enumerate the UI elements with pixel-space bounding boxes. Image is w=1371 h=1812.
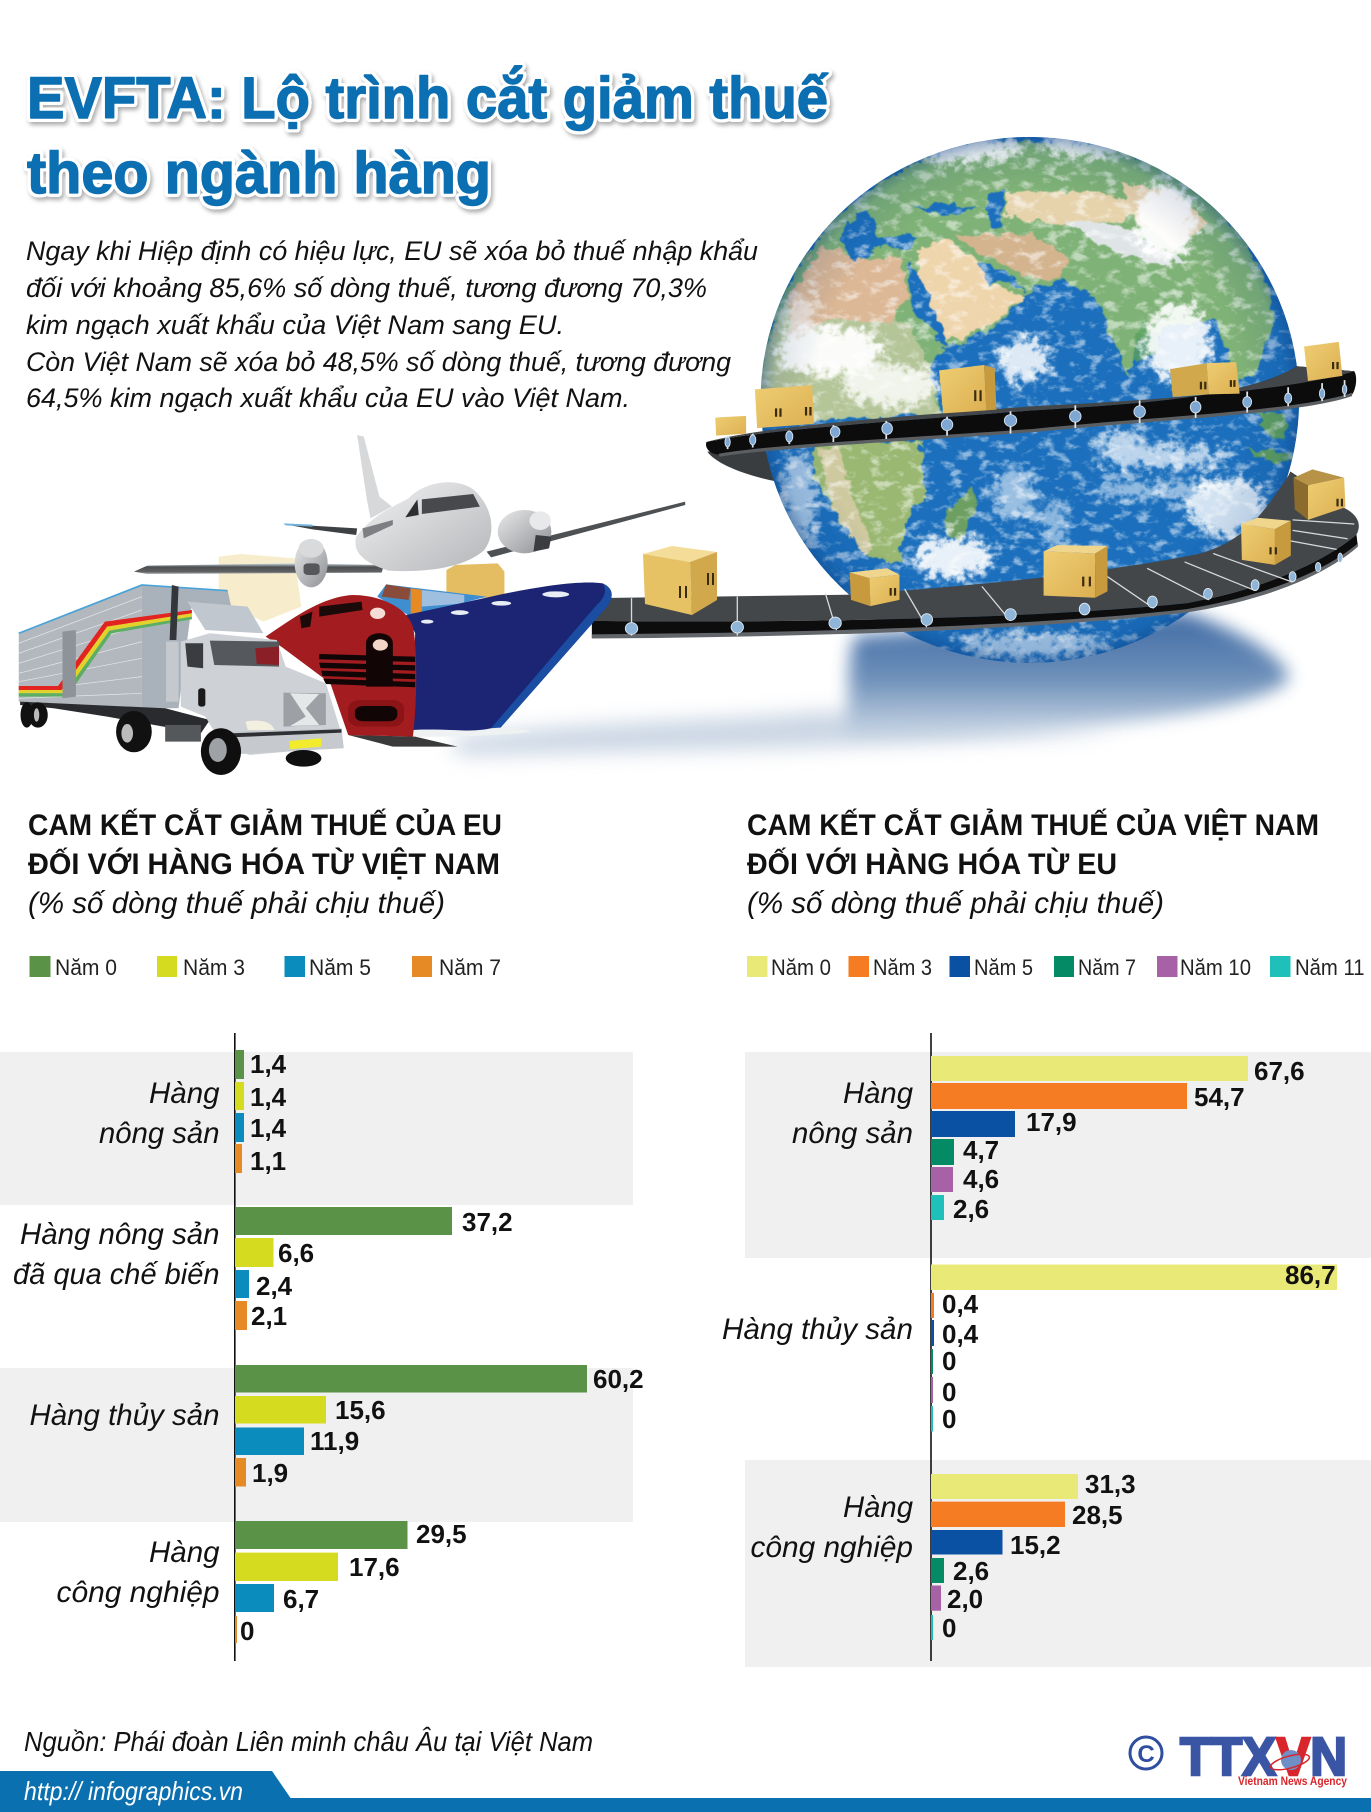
- logo: TTXVN: Vietnam News Agency: [1238, 1776, 1348, 1788]
- box behind ship: [446, 563, 504, 600]
- group: Hàng thủy sản: Hàng thủy sản: [30, 1399, 220, 1432]
- group: Hàng nông sản: nông sản: [99, 1117, 220, 1150]
- group: Hàng thủy sản: 15,6: [335, 1395, 386, 1425]
- title: [27, 66, 829, 206]
- intro paragraph: 64,5% kim ngạch xuất khẩu của EU vào Việt Nam.: [26, 383, 630, 413]
- band: Hàng nông sản: [745, 1052, 1371, 1258]
- group: Hàng thủy sản: Hàng thủy sản: [722, 1313, 913, 1346]
- group: Hàng thủy sản: 60,2: [593, 1364, 644, 1394]
- group: Hàng công nghiệp: 0: [942, 1613, 956, 1643]
- group: Hàng nông sản đã qua chế biến: 37,2: [462, 1207, 513, 1237]
- legend: right chart: Năm 7: [1078, 955, 1136, 980]
- band: Hàng nông sản: [0, 1052, 633, 1205]
- axis: [234, 1033, 236, 1661]
- group: Hàng nông sản: nông sản: [792, 1117, 913, 1150]
- group: Hàng công nghiệp: [750, 1469, 1136, 1643]
- axis: [930, 1033, 932, 1661]
- title: theo ngành hàng: [27, 141, 491, 206]
- group: Hàng công nghiệp: 6,7: [283, 1584, 319, 1614]
- legend: right chart: [747, 955, 1364, 980]
- group: Hàng thủy sản: 0: [942, 1346, 956, 1376]
- illustration: large box on lower belt: [643, 546, 717, 615]
- heading: left chart: ĐỐI VỚI HÀNG HÓA TỪ VIỆT NAM: [28, 847, 500, 881]
- illustration: globe with conveyor belts: [592, 133, 1359, 667]
- group: Hàng nông sản: 17,9: [1026, 1107, 1077, 1137]
- title: theo ngành hàng: [27, 141, 491, 206]
- legend: right chart: Năm 5: [974, 955, 1033, 980]
- heading: left chart: (% số dòng thuế phải chịu thuế): [28, 887, 445, 920]
- footer bar with website: http:// infographics.vn: [24, 1776, 243, 1806]
- group: Hàng nông sản đã qua chế biến: 6,6: [278, 1238, 314, 1268]
- group: Hàng công nghiệp: 31,3: [1085, 1469, 1136, 1499]
- group: Hàng thủy sản: 0: [942, 1377, 956, 1407]
- legend: left chart: Năm 3: [183, 955, 245, 980]
- group: Hàng thủy sản: 0: [942, 1404, 956, 1434]
- group: Hàng công nghiệp: 0: [240, 1616, 254, 1646]
- logo: TTXVN: C: [1137, 1741, 1155, 1768]
- legend: left chart: Năm 7: [439, 955, 501, 980]
- semi truck: [19, 585, 344, 775]
- chart: Vietnam commitments: [722, 1033, 1371, 1667]
- illustration: globe shadow: [451, 612, 1288, 756]
- ramp: [348, 735, 458, 747]
- heading: right chart: (% số dòng thuế phải chịu thuế): [747, 887, 1164, 920]
- group: Hàng nông sản: 1,4: [250, 1049, 287, 1079]
- heading: left chart: [28, 808, 502, 920]
- group: Hàng nông sản: 1,4: [250, 1082, 287, 1112]
- group: Hàng nông sản: 2,6: [953, 1194, 989, 1224]
- intro paragraph: Ngay khi Hiệp định có hiệu lực, EU sẽ xóa bỏ thuế nhập khẩu: [26, 236, 758, 266]
- legend: right chart: Năm 10: [1180, 955, 1251, 980]
- legend: right chart: Năm 11: [1295, 955, 1364, 980]
- group: Hàng nông sản: 67,6: [1254, 1056, 1305, 1086]
- group: Hàng nông sản đã qua chế biến: [13, 1207, 513, 1331]
- group: Hàng thủy sản: [722, 1260, 1337, 1434]
- legend: right chart: Năm 3: [873, 955, 932, 980]
- intro paragraph: đối với khoảng 85,6% số dòng thuế, tương đương 70,3%: [26, 273, 707, 303]
- container ship: [377, 582, 612, 737]
- group: Hàng thủy sản: 0,4: [942, 1319, 979, 1349]
- footer bar with website: [0, 1771, 1371, 1812]
- lower belt back section: [1266, 471, 1341, 541]
- group: Hàng nông sản: Hàng: [149, 1077, 220, 1110]
- group: Hàng nông sản: 4,6: [963, 1164, 999, 1194]
- globe: [755, 133, 1306, 667]
- group: Hàng công nghiệp: 2,6: [953, 1556, 989, 1586]
- group: Hàng nông sản: 54,7: [1194, 1082, 1245, 1112]
- group: Hàng công nghiệp: [56, 1519, 467, 1646]
- group: Hàng công nghiệp: 29,5: [416, 1519, 467, 1549]
- upper conveyor belt: [706, 366, 1356, 457]
- illustration: transport vehicles: [19, 435, 685, 775]
- upper belt underside: [707, 448, 775, 481]
- title: EVFTA: Lộ trình cắt giảm thuế: [27, 66, 829, 131]
- intro paragraph: Còn Việt Nam sẽ xóa bỏ 48,5% số dòng thuế, tương đương: [26, 347, 731, 377]
- group: Hàng công nghiệp: 17,6: [349, 1552, 400, 1582]
- heading: right chart: ĐỐI VỚI HÀNG HÓA TỪ EU: [747, 847, 1117, 881]
- group: Hàng công nghiệp: 28,5: [1072, 1500, 1123, 1530]
- group: Hàng công nghiệp: công nghiệp: [750, 1531, 913, 1564]
- legend: left chart: [30, 955, 501, 980]
- legend: right chart: Năm 0: [771, 955, 831, 980]
- chart: EU commitments: [0, 1033, 644, 1661]
- heading: left chart: CAM KẾT CẮT GIẢM THUẾ CỦA EU: [28, 808, 502, 842]
- group: Hàng công nghiệp: 2,0: [947, 1584, 983, 1614]
- group: Hàng thủy sản: 11,9: [310, 1426, 359, 1456]
- group: Hàng nông sản: [792, 1056, 1305, 1224]
- intro paragraph: kim ngạch xuất khẩu của Việt Nam sang EU.: [26, 310, 564, 340]
- group: Hàng nông sản đã qua chế biến: Hàng nông sản: [20, 1218, 220, 1251]
- group: Hàng nông sản đã qua chế biến: 2,4: [256, 1271, 293, 1301]
- group: Hàng công nghiệp: công nghiệp: [56, 1576, 220, 1609]
- band: Hàng công nghiệp: [745, 1460, 1371, 1667]
- group: Hàng nông sản: Hàng: [843, 1077, 913, 1110]
- group: Hàng thủy sản: [30, 1364, 644, 1488]
- cardboard boxes on belts: [715, 342, 1345, 606]
- cream box behind plane: [219, 554, 301, 622]
- group: Hàng nông sản: 1,4: [250, 1113, 287, 1143]
- logo: TTXVN: TTXVN: [1180, 1727, 1347, 1787]
- group: Hàng thủy sản: 86,7: [1285, 1260, 1336, 1290]
- group: Hàng công nghiệp: 15,2: [1010, 1530, 1061, 1560]
- group: Hàng nông sản đã qua chế biến: đã qua chế biến: [13, 1258, 220, 1291]
- legend: left chart: Năm 0: [55, 955, 117, 980]
- lower conveyor belt: [592, 473, 1359, 639]
- group: Hàng công nghiệp: Hàng: [843, 1491, 913, 1524]
- legend: left chart: Năm 5: [309, 955, 371, 980]
- group: Hàng thủy sản: 0,4: [942, 1289, 979, 1319]
- title: EVFTA: Lộ trình cắt giảm thuế: [27, 66, 829, 131]
- group: Hàng công nghiệp: Hàng: [149, 1536, 220, 1569]
- source note: Nguồn: Phái đoàn Liên minh châu Âu tại Việt Nam: [24, 1726, 593, 1757]
- intro paragraph: [26, 236, 758, 413]
- group: Hàng nông sản: 1,1: [250, 1146, 286, 1176]
- red train: [266, 595, 416, 737]
- group: Hàng nông sản: [99, 1049, 287, 1176]
- band: Hàng thủy sản: [0, 1368, 633, 1522]
- heading: right chart: CAM KẾT CẮT GIẢM THUẾ CỦA VIỆT NAM: [747, 808, 1319, 842]
- group: Hàng nông sản: 4,7: [963, 1135, 999, 1165]
- heading: right chart: [747, 808, 1319, 920]
- group: Hàng nông sản đã qua chế biến: 2,1: [251, 1301, 287, 1331]
- group: Hàng thủy sản: 1,9: [252, 1458, 288, 1488]
- airplane: [134, 435, 685, 587]
